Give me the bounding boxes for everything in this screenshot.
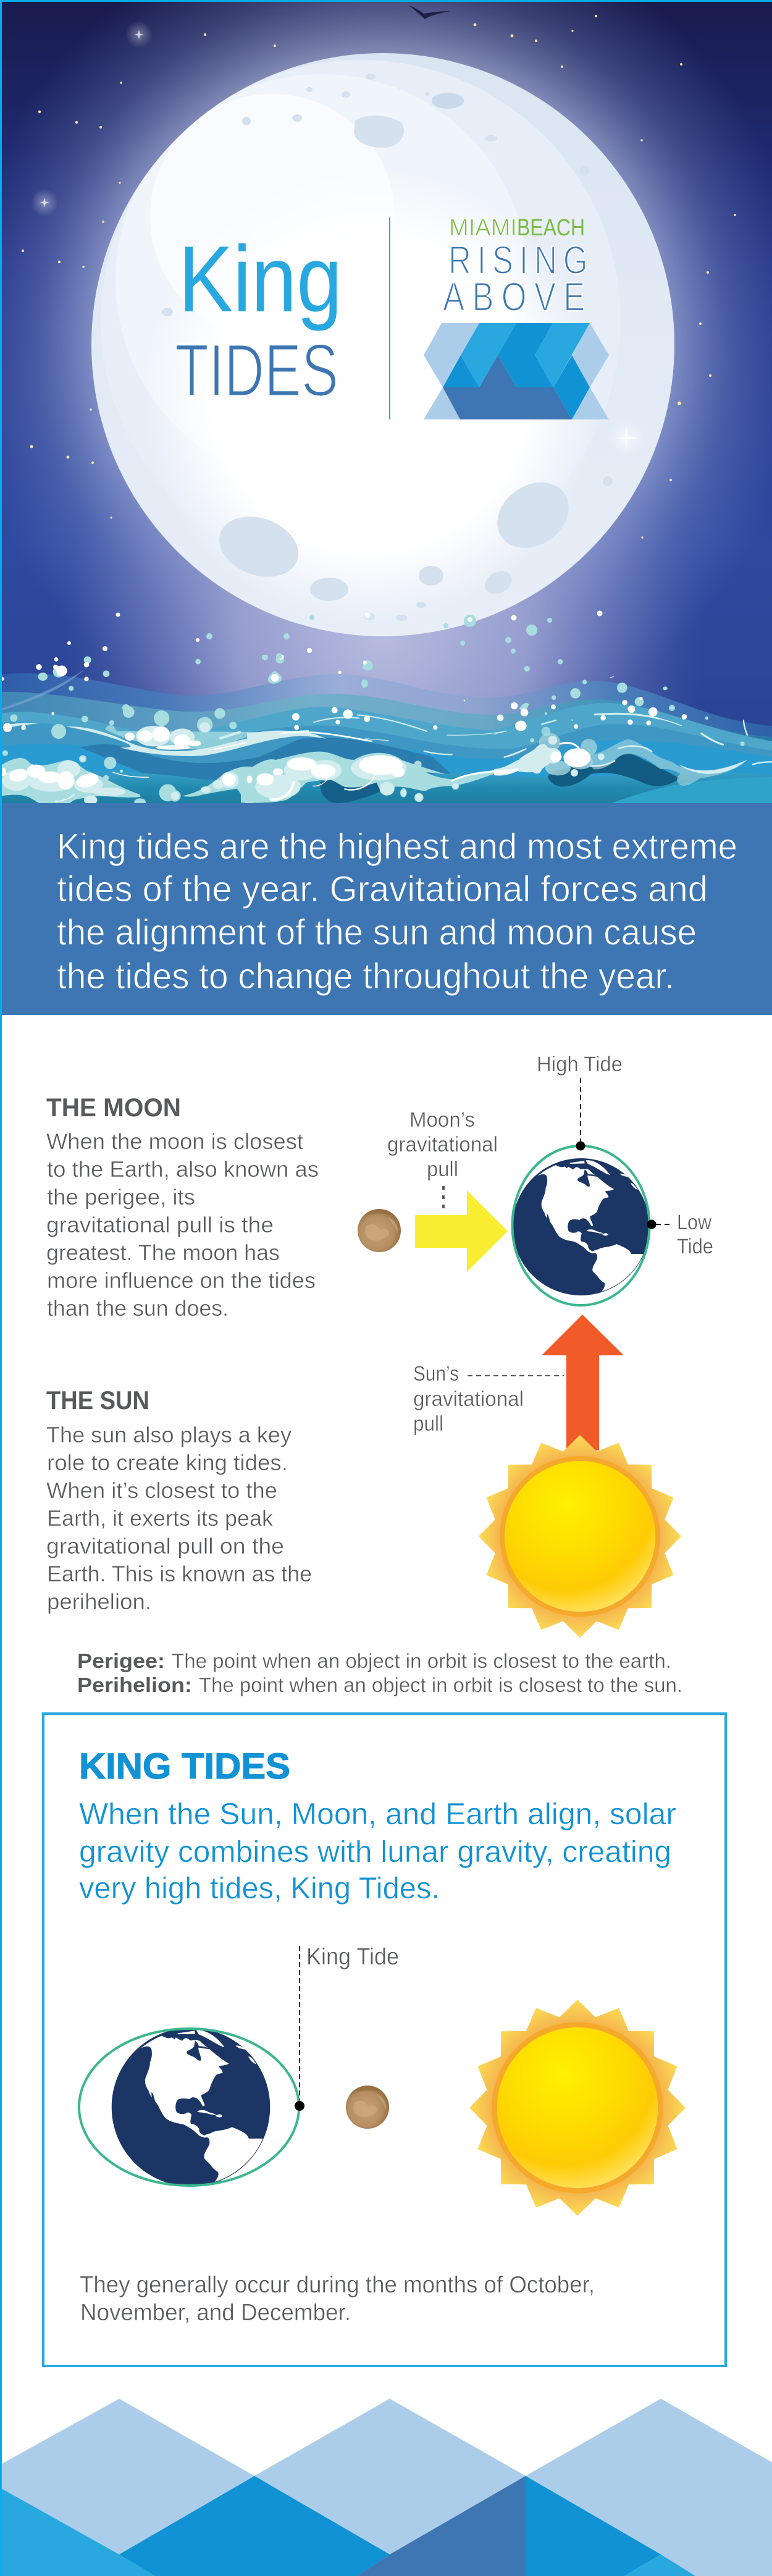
label: sun's gravitational pull: gravitational — [413, 1387, 524, 1411]
moon body text: than the sun does. — [47, 1295, 229, 1321]
moon body text: When the moon is closest — [46, 1129, 303, 1154]
arrow: sun pull — [542, 1315, 624, 1450]
months text: November, and December. — [80, 2300, 351, 2326]
moon body text — [46, 1129, 319, 1321]
definitions: The point when an object in orbit is closest to the earth. — [172, 1649, 671, 1672]
moon body text: more influence on the tides — [47, 1268, 316, 1293]
footer geometric mountains — [0, 2399, 772, 2576]
logo: Miami Beach Rising Above: ABOVE — [443, 274, 585, 319]
sun body text: gravitational pull on the — [46, 1533, 284, 1559]
panel: the moon text — [46, 1093, 319, 1321]
icon: sun — [469, 2000, 686, 2216]
waves — [0, 654, 772, 806]
sparkle on moon edge — [608, 419, 645, 457]
icon: sun — [479, 1435, 681, 1638]
moon — [91, 53, 674, 636]
intro text: King tides are the highest and most extreme — [57, 827, 737, 867]
upper swoosh — [66, 726, 309, 756]
panel: night sky hero — [0, 0, 772, 806]
sun pull leader line — [468, 1375, 564, 1376]
low tide leader line — [656, 1224, 671, 1225]
foam middle section — [241, 654, 525, 803]
logo: Miami Beach Rising Above: RISING — [448, 239, 588, 282]
label: moon's gravitational pull: pull — [427, 1158, 458, 1181]
foam right section — [494, 659, 772, 786]
intro text: the tides to change throughout the year. — [57, 956, 674, 996]
label: sun's gravitational pull: Sun’s — [413, 1362, 459, 1386]
label: sun's gravitational pull: pull — [413, 1412, 443, 1436]
intro text: the alignment of the sun and moon cause — [57, 912, 697, 953]
heading: the sun: THE SUN — [46, 1386, 149, 1415]
moon body text: to the Earth, also known as — [47, 1156, 319, 1182]
high tide dot — [576, 1142, 585, 1150]
definitions — [77, 1649, 682, 1696]
heading: king tides: KING TIDES — [79, 1746, 290, 1787]
moon pull leader line — [442, 1186, 445, 1212]
divider — [389, 217, 390, 419]
label: king tide: King Tide — [306, 1944, 399, 1970]
sparkle stars — [31, 21, 153, 216]
king tides description: very high tides, King Tides. — [79, 1872, 440, 1905]
label: sun's gravitational pull — [413, 1362, 524, 1436]
sun body text: perihelion. — [47, 1589, 151, 1614]
sun body text: Earth. This is known as the — [47, 1561, 312, 1586]
sun body text: The sun also plays a key — [46, 1422, 292, 1447]
sun body text: role to create king tides. — [47, 1450, 288, 1475]
intro text — [57, 827, 737, 996]
arrow: moon pull — [415, 1190, 508, 1272]
logo: Miami Beach Rising Above — [424, 215, 609, 419]
diagram: gravitational pull — [358, 1053, 713, 1638]
sky background — [0, 0, 772, 803]
foam tail toward middle — [182, 767, 253, 803]
swoosh highlight — [2, 669, 85, 710]
panel: the sun text — [46, 1386, 312, 1614]
icon: moon — [358, 1209, 401, 1252]
panel: king tides box — [43, 1714, 726, 2366]
logo: Miami Beach Rising Above: MIAMI — [449, 215, 517, 241]
label: high tide: High Tide — [537, 1053, 623, 1076]
droplets above waves — [53, 610, 603, 671]
moon body text: greatest. The moon has — [46, 1240, 280, 1265]
label: low tide: Tide — [677, 1235, 713, 1258]
diagram: alignment — [79, 1944, 686, 2216]
king tides description: gravity combines with lunar gravity, creating — [79, 1835, 671, 1869]
months text: They generally occur during the months of October, — [80, 2272, 595, 2298]
label: moon's gravitational pull: gravitational — [387, 1133, 498, 1156]
king tide leader line — [299, 1946, 300, 2106]
intro text: tides of the year. Gravitational forces and — [57, 869, 708, 909]
moon body text: the perigee, its — [47, 1184, 195, 1210]
sun body text — [46, 1422, 312, 1614]
sun body text: When it’s closest to the — [46, 1478, 277, 1503]
months text — [80, 2272, 595, 2326]
tide ellipse — [79, 2029, 299, 2186]
moon glow — [0, 0, 772, 803]
droplets — [2, 656, 237, 802]
icon: earth — [112, 2028, 270, 2186]
king tide dot — [295, 2101, 304, 2111]
high tide leader line — [580, 1078, 581, 1146]
tide ellipse — [513, 1146, 650, 1305]
panel: intro band — [0, 803, 772, 1015]
logo: Miami Beach Rising Above: BEACH — [517, 215, 585, 241]
bird — [409, 6, 450, 19]
low tide dot — [647, 1219, 656, 1229]
title: King Tides: King — [178, 227, 342, 332]
stars — [22, 15, 736, 539]
moon body text: gravitational pull is the — [46, 1212, 274, 1237]
label: low tide — [677, 1211, 713, 1258]
icon: moon — [346, 2086, 389, 2129]
logo mark — [424, 323, 609, 419]
label: moon's gravitational pull — [387, 1108, 498, 1181]
moon craters — [162, 74, 613, 621]
sun body text: Earth, it exerts its peak — [47, 1505, 274, 1531]
definitions: The point when an object in orbit is closest to the sun. — [199, 1673, 682, 1696]
title: King Tides — [175, 227, 342, 412]
label: low tide: Low — [677, 1211, 711, 1234]
label: moon's gravitational pull: Moon’s — [409, 1108, 475, 1132]
definitions: Perihelion: — [77, 1673, 192, 1696]
icon: earth — [513, 1158, 650, 1295]
title: King Tides: TIDES — [175, 328, 338, 412]
definitions: Perigee: — [77, 1649, 165, 1672]
heading: the moon: THE MOON — [46, 1093, 181, 1122]
king tides description: When the Sun, Moon, and Earth align, solar — [79, 1798, 676, 1831]
foam left section — [0, 656, 309, 806]
king tides description — [79, 1798, 676, 1905]
